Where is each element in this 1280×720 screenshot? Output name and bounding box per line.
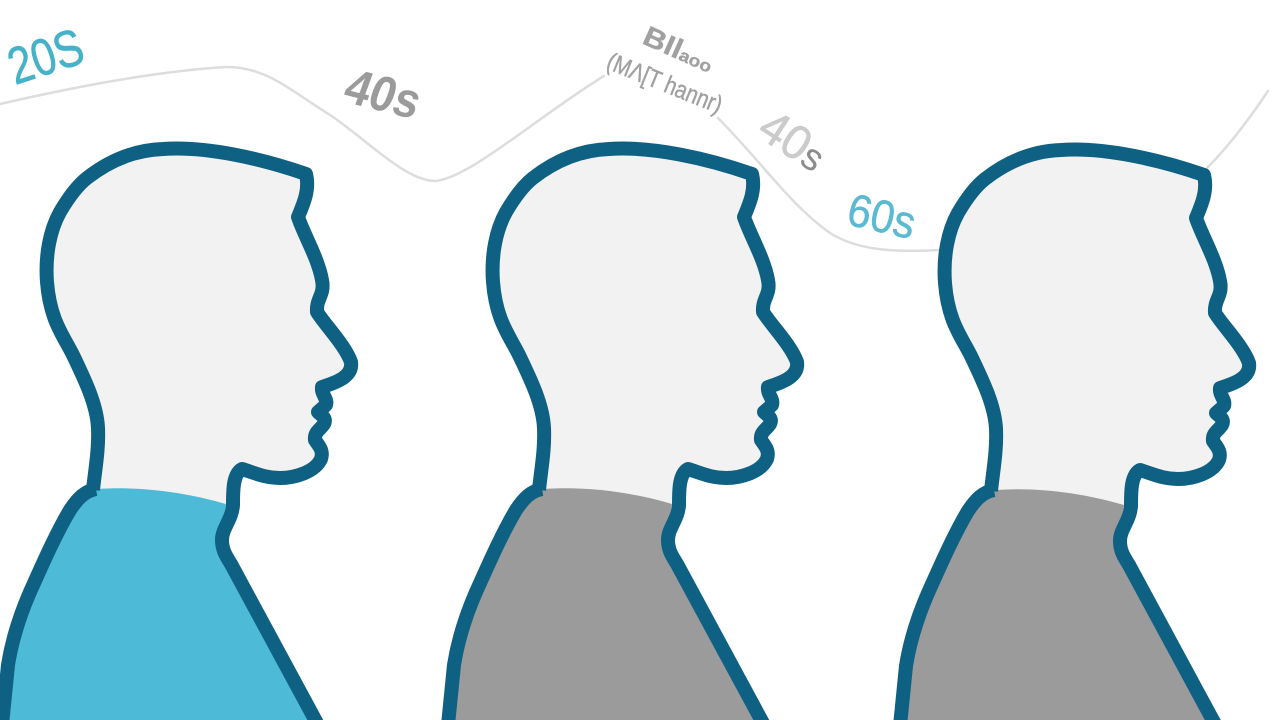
garbled small caption	[603, 20, 726, 119]
head fill	[945, 150, 1249, 511]
shirt	[448, 488, 764, 720]
caption line one: BIlaoo	[639, 20, 719, 79]
shirt	[2, 488, 318, 720]
label: 60s: 60s	[843, 183, 921, 249]
head and body outline	[448, 149, 797, 720]
figure: 20s profile in blue	[2, 149, 351, 720]
figure: 60s profile in grey	[900, 150, 1249, 720]
head fill	[493, 149, 797, 510]
figure: 40s profile in grey	[448, 149, 797, 720]
head and body outline	[900, 150, 1249, 720]
head and body outline	[2, 149, 351, 720]
label: 40s second: 40s	[749, 100, 837, 182]
caption line two: (MɅ[T hannr)	[603, 48, 726, 119]
label: 40s first: 40s	[337, 59, 429, 130]
age trend line	[0, 67, 1268, 251]
shirt	[900, 489, 1216, 720]
label: 20s: 20S	[1, 18, 91, 96]
head fill	[47, 149, 351, 510]
